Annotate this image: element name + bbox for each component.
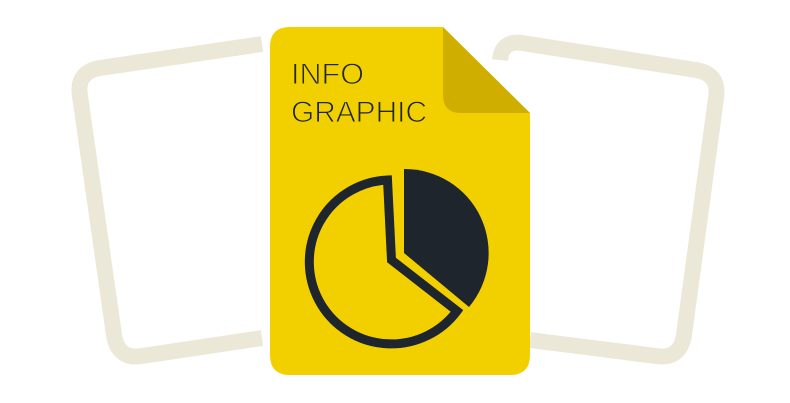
pie chart icon xyxy=(309,169,489,344)
main document: GRAPHIC xyxy=(291,96,427,129)
folded corner xyxy=(443,27,530,113)
main document xyxy=(270,27,530,375)
back card: right xyxy=(500,43,717,357)
title text: INFO xyxy=(291,58,364,91)
back card: left xyxy=(79,44,262,357)
